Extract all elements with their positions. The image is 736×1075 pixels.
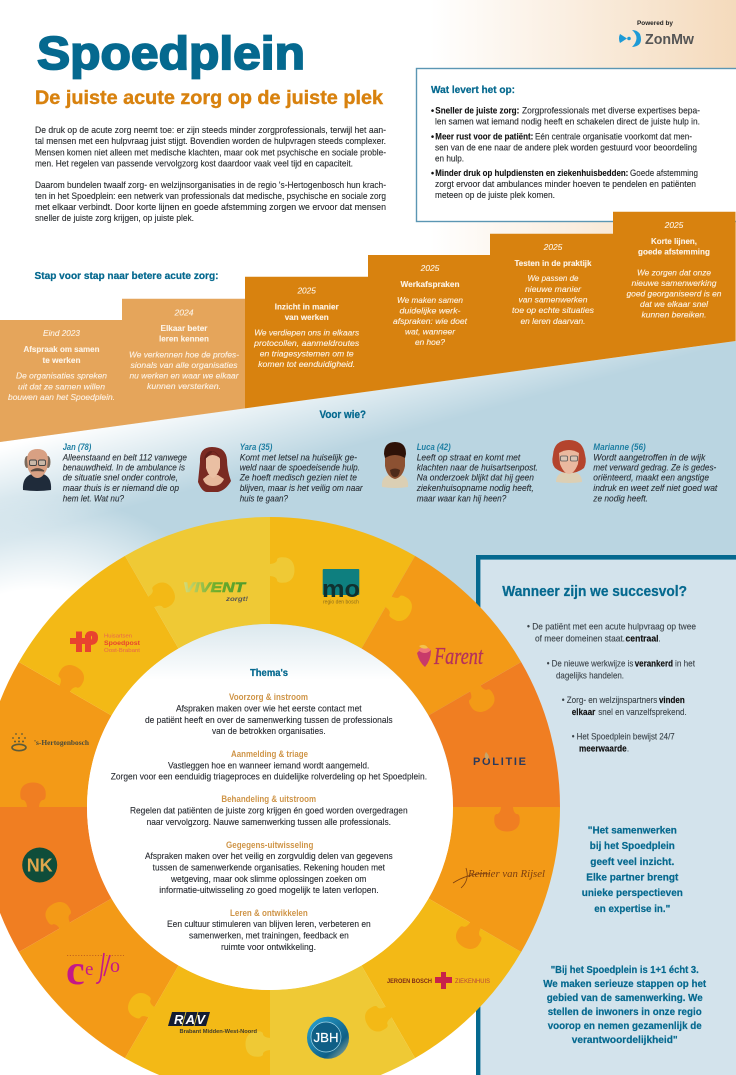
theme: voorzorg xyxy=(145,692,393,736)
step: werkafspraken xyxy=(393,263,468,347)
quote: 1+1 is 3: stellen de inwoners in onze regio xyxy=(548,1007,702,1018)
logo: ZonMw xyxy=(619,21,694,48)
theme: aanmelding: Vastleggen hoe en wanneer iemand wordt aangemeld. xyxy=(168,760,369,770)
text: Jan: Alleenstaand en belt 112 vanwege xyxy=(62,452,187,462)
text: Marianne: Marianne (56) xyxy=(593,442,646,452)
quote: samenwerken: bij het Spoedplein xyxy=(590,841,675,852)
step: korte lijnen: Korte lijnen, xyxy=(651,236,697,246)
heading: thema's: Thema's xyxy=(250,667,288,679)
theme: aanmelding: Aanmelding & triage xyxy=(231,749,308,759)
icon: Luca portrait xyxy=(382,442,408,488)
logo: RAV: RAV xyxy=(174,1012,206,1027)
logo: Politie: POLITIE xyxy=(473,756,526,768)
step: korte lijnen: nieuwe samenwerking xyxy=(632,278,717,288)
icon: Jan portrait xyxy=(23,449,51,491)
text: Yara: Ze hoeft medisch gezien niet te xyxy=(239,472,357,482)
step: korte lijnen: We zorgen dat onze xyxy=(637,268,711,278)
step: korte lijnen xyxy=(626,220,722,320)
text: Jan xyxy=(62,442,187,504)
text block: introduction: Mensen komen niet alleen met medische klachten, maar ook met psychische en sociale proble- xyxy=(35,148,386,158)
step: werkafspraken: afspraken: wie doet xyxy=(393,316,468,326)
logo: Huisartsen Spoedpost: Spoedpost xyxy=(104,640,141,647)
text: Yara: huis te gaan? xyxy=(240,494,288,504)
logo: Cello: o xyxy=(110,955,120,977)
step: eind 2023 xyxy=(8,328,115,402)
text: Luca: klachten naar de huisartsenpost. xyxy=(417,462,538,472)
list: success criteria: in het xyxy=(675,658,695,668)
list: benefits: • xyxy=(431,132,434,142)
text: Yara: Yara (35) xyxy=(240,442,272,452)
text: Jan: de situatie snel onder controle, xyxy=(63,472,178,482)
list: success criteria: . xyxy=(627,744,629,754)
logo: RAV: Brabant Midden-West-Noord xyxy=(180,1029,257,1035)
logo: 's-Hertogenbosch xyxy=(12,733,90,751)
text: Marianne: met verward gedrag. Ze is gedes- xyxy=(593,462,716,472)
logo: Farent xyxy=(417,644,484,670)
list: success criteria: of meer domeinen staat. xyxy=(535,634,625,644)
step: testen in de praktijk xyxy=(512,242,595,326)
step: 2024 xyxy=(129,308,240,391)
text block: introduction: sneller de juiste zorg krijgen, op juiste plek. xyxy=(35,213,194,223)
panel: wat levert het op xyxy=(416,68,736,222)
step: testen in de praktijk: toe op echte situaties xyxy=(512,305,595,315)
step: inzicht xyxy=(253,286,360,369)
persona: Yara xyxy=(198,442,364,504)
persona: Luca xyxy=(382,442,538,504)
list: success criteria: • De patiënt met een acute hulpvraag op twee xyxy=(527,622,696,632)
step: inzicht: komen tot eenduidigheid. xyxy=(258,359,355,369)
step: werkafspraken: We maken samen xyxy=(397,295,463,305)
step: 2024: sionals van alle organisaties xyxy=(130,360,238,370)
theme: gegevens xyxy=(145,840,393,895)
quote: samenwerken: Elke partner brengt xyxy=(586,872,679,884)
subtitle: De juiste acute zorg op de juiste plek xyxy=(35,87,383,109)
timeline: staircase of steps xyxy=(0,212,736,442)
logo: NK xyxy=(22,848,57,882)
heading: voor wie: Voor wie? xyxy=(320,409,366,421)
logo: Jeroen Bosch Ziekenhuis: JEROEN BOSCH xyxy=(387,979,432,985)
text: Jan: benauwdheid. In de ambulance is xyxy=(63,462,186,472)
theme: leren: Een cultuur stimuleren van blijven leren, verbeteren en xyxy=(167,919,371,929)
logo: Vivent: zorgt! xyxy=(225,596,249,603)
step: testen in de praktijk: We passen de xyxy=(528,273,579,283)
quote: samenwerken xyxy=(582,826,683,915)
logo: JBH: JBH xyxy=(314,1030,338,1045)
text: Luca: maar waar kan hij heen? xyxy=(417,494,506,504)
heading: succesvol: Wanneer zijn we succesvol? xyxy=(502,583,687,600)
text: Marianne: Wordt aangetroffen in de wijk xyxy=(593,452,706,462)
list: success criteria: snel en vanzelfsprekend. xyxy=(598,707,687,717)
step: eind 2023: Afspraak om samen xyxy=(24,344,100,354)
text: Yara: weld naar de spoedeisende hulp. xyxy=(240,462,360,472)
step: eind 2023: uit dat ze samen willen xyxy=(18,382,105,392)
step: inzicht: Inzicht in manier xyxy=(275,302,339,312)
step: werkafspraken: wat, wanneer xyxy=(405,326,456,336)
panel: wanneer zijn we succesvol xyxy=(476,555,736,1075)
theme: behandeling: Regelen dat patiënten de juiste zorg krijgen én goed worden overgedragen xyxy=(130,806,408,816)
list: success criteria xyxy=(527,622,696,754)
text: Jan: Jan (78) xyxy=(63,442,91,452)
logo: Huisartsen Spoedpost: Oost-Brabant xyxy=(104,648,141,654)
persona: Jan xyxy=(23,442,187,504)
theme: voorzorg: Voorzorg & instroom xyxy=(229,692,308,702)
logo: Cello: e xyxy=(85,959,93,980)
text: Marianne: oriënteerd, maakt een angstige xyxy=(593,472,709,482)
list: benefits xyxy=(431,106,700,200)
logo: Cello: c xyxy=(66,948,85,994)
step: testen in de praktijk: 2025 xyxy=(543,242,563,252)
text block: introduction: men. Het regelen van passende vervolgzorg kost daardoor vaak veel tijd en capaciteit. xyxy=(35,158,353,168)
list: success criteria: verankerd xyxy=(635,658,673,668)
step: 2024: kunnen versterken. xyxy=(147,381,221,391)
text block: introduction: Daarom bundelen twaalf zorg- en welzijnsorganisaties in de regio 's-Hertogenbosch hun krach- xyxy=(35,180,386,190)
list: success criteria: dagelijks handelen. xyxy=(556,671,624,681)
theme: leren xyxy=(167,908,371,952)
step: eind 2023: De organisaties spreken xyxy=(16,370,107,380)
step: inzicht: van werken xyxy=(285,312,329,322)
logo: Vivent: VIVENT xyxy=(183,579,247,595)
quote: samenwerken: en expertise in." xyxy=(594,904,670,915)
quote: samenwerken: unieke perspectieven xyxy=(582,888,683,899)
text: Yara xyxy=(239,442,364,504)
text: Yara: blijven, maar is het veilig om naar xyxy=(240,483,364,493)
quote: samenwerken: "Het samenwerken xyxy=(588,826,677,836)
theme: behandeling xyxy=(130,794,408,827)
step: 2024: nu werken en waar we elkaar xyxy=(130,370,240,380)
logo: Huisartsen Spoedpost: Huisartsen xyxy=(104,634,132,640)
logo: Vivent xyxy=(183,579,249,603)
step: korte lijnen: goed georganiseerd is en xyxy=(626,288,722,298)
logo: MO regio den bosch: mo xyxy=(322,576,360,603)
step: testen in de praktijk: en leren daarvan. xyxy=(520,316,586,326)
step: testen in de praktijk: nieuwe manier xyxy=(525,284,582,294)
list: success criteria: • De nieuwe werkwijze is xyxy=(547,658,634,668)
list: benefits: zorgt ervoor dat ambulances minder hoeven te pendelen en patiënten xyxy=(435,179,696,189)
step: korte lijnen: 2025 xyxy=(664,220,684,230)
step: eind 2023: bouwen aan het Spoedplein. xyxy=(8,392,115,402)
theme: leren: ruimte voor ontwikkeling. xyxy=(221,942,316,952)
text block: introduction: ten in het Spoedplein: een netwerk van professionals dat medische, psychische en sociale zorg xyxy=(35,191,386,201)
text: Marianne: indruk en weet zelf niet goed wat xyxy=(593,483,718,493)
text: Jan: maar thuis is er niemand die op xyxy=(63,483,179,493)
logo: Cello xyxy=(66,948,124,994)
theme: voorzorg: de patiënt heeft en over de samenwerking tussen de professionals xyxy=(145,715,393,725)
list: benefits: Eén centrale organisatie voorkomt dat men- xyxy=(535,132,692,142)
icon: Marianne portrait xyxy=(552,440,586,483)
text: Yara: Komt met letsel na huiselijk ge- xyxy=(240,452,357,462)
list: benefits: en hulp. xyxy=(435,154,464,164)
text block: introduction: tal mensen met een hulpvraag juist stijgt. Bovendien worden de hulpvragen steeds complexer. xyxy=(35,136,386,146)
quote: 1+1 is 3: We maken serieuze stappen op het xyxy=(543,979,707,990)
text block: introduction xyxy=(35,125,386,223)
theme: voorzorg: Afspraken maken over wie het eerste contact met xyxy=(176,704,362,714)
text: Luca: Luca (42) xyxy=(417,442,451,452)
step: inzicht: We verdiepen ons in elkaars xyxy=(254,328,360,338)
text: Jan: hem let. Wat nu? xyxy=(63,494,124,504)
logo: JBH xyxy=(307,1017,349,1059)
step: 2024: Elkaar beter xyxy=(160,323,208,333)
quote: 1+1 is 3: gebied van de samenwerking. We xyxy=(547,993,703,1004)
list: success criteria: centraal xyxy=(626,634,658,644)
list: success criteria: • Het Spoedplein bewijst 24/7 xyxy=(572,732,675,742)
list: success criteria: meerwaarde xyxy=(579,744,627,754)
list: benefits: sen van de ene naar de andere plek worden gestuurd voor beoordeling xyxy=(435,142,697,152)
step: inzicht: en triagesystemen om te xyxy=(260,348,354,358)
theme: leren: Leren & ontwikkelen xyxy=(230,908,308,918)
inner circle xyxy=(87,624,453,990)
theme: gegevens: Gegegens-uitwisseling xyxy=(226,840,313,850)
list: success criteria: • Zorg- en welzijnspartners xyxy=(562,695,658,705)
step: testen in de praktijk: van samenwerken xyxy=(518,294,588,304)
theme: gegevens: informatie-uitwisseling zo goed mogelijk te laten verlopen. xyxy=(159,885,379,895)
quote: 1+1 is 3: voorop en nemen gezamenlijk de xyxy=(548,1021,702,1032)
list: benefits: meteen op de juiste plek komen. xyxy=(435,190,555,200)
step: 2024: 2024 xyxy=(174,308,194,318)
logo: ZonMw: ZonMw xyxy=(645,31,694,48)
logo: Farent: Farent xyxy=(433,644,484,670)
logo: Reinier van Rijsel xyxy=(453,868,545,888)
theme: behandeling: Behandeling & uitstroom xyxy=(221,794,316,804)
logo: Reinier van Rijsel: Reinier van Rijsel xyxy=(467,869,545,880)
text: Marianne: ze nodig heeft. xyxy=(592,494,648,504)
logo: Huisartsen Spoedpost xyxy=(70,631,141,654)
step: testen in de praktijk: Testen in de praktijk xyxy=(514,258,592,268)
step: 2024: We verkennen hoe de profes- xyxy=(129,350,239,360)
list: benefits: • xyxy=(431,168,434,178)
step: inzicht: 2025 xyxy=(296,286,316,296)
step: 2024: leren kennen xyxy=(159,334,209,344)
logo: 's-Hertogenbosch: 's-Hertogenbosch xyxy=(34,738,90,747)
text: Luca: Na onderzoek blijkt dat hij geen xyxy=(417,472,534,482)
step: werkafspraken: Werkafspraken xyxy=(400,279,460,289)
theme: gegevens: tussen de samenwerkende organisaties. Rekening houden met xyxy=(153,862,385,872)
logo: Jeroen Bosch Ziekenhuis xyxy=(387,972,490,989)
list: benefits: len samen wat iemand nodig heeft en schakelen direct de juiste hulp in. xyxy=(435,116,700,126)
logo: RAV xyxy=(168,1012,257,1035)
theme: behandeling: naar vervolgzorg. Nauwe samenwerking tussen alle professionals. xyxy=(147,817,391,827)
logo: NK: NK xyxy=(27,856,53,876)
step: korte lijnen: kunnen bereiken. xyxy=(642,310,706,320)
list: success criteria: . xyxy=(658,634,661,644)
text block: introduction: De druk op de acute zorg neemt toe: er zijn steeds minder zorgprofessionals, terwijl het aan- xyxy=(35,125,386,135)
text block: introduction: met elkaar verbindt. Door korte lijnen en goede afstemming zorgen we ervoor dat mensen xyxy=(35,202,386,212)
list: benefits: Zorgprofessionals met diverse expertises bepa- xyxy=(522,106,700,116)
theme: leren: samenwerken, met trainingen, feedback en xyxy=(189,930,349,940)
theme: gegevens: wetgeving, maar ook slimme oplossingen zoeken om xyxy=(170,874,366,884)
puzzle tabs xyxy=(20,557,520,1057)
list: benefits: Sneller de juiste zorg: xyxy=(435,106,519,116)
list: success criteria: elkaar xyxy=(572,707,596,717)
text: Marianne xyxy=(592,442,718,504)
quote: 1+1 is 3: verantwoordelijkheid" xyxy=(572,1035,678,1046)
step: eind 2023: te werken xyxy=(42,355,80,365)
chart: puzzle ring of partner organisations xyxy=(0,517,560,1075)
list: success criteria: vinden xyxy=(659,695,685,705)
step: eind 2023: Eind 2023 xyxy=(43,328,80,338)
heading: wat levert het op: Wat levert het op: xyxy=(431,84,515,96)
quote: 1+1 is 3 xyxy=(543,965,707,1046)
text: Luca xyxy=(416,442,538,504)
theme: aanmelding: Zorgen voor een eenduidig triageproces en duidelijke rolverdeling op het Spoedplein. xyxy=(111,772,427,782)
title: Spoedplein xyxy=(37,27,305,79)
logo: MO regio den bosch: regio den bosch xyxy=(323,600,359,606)
theme: voorzorg: van de betrokken organisaties. xyxy=(212,726,326,736)
step: werkafspraken: en hoe? xyxy=(415,337,445,347)
theme: gegevens: Afspraken maken over het veilig en zorgvuldig delen van gegevens xyxy=(145,851,393,861)
step: korte lijnen: goede afstemming xyxy=(638,246,710,256)
logo: ZonMw: Powered by xyxy=(637,21,674,27)
step: inzicht: protocollen, aanmeldroutes xyxy=(253,338,360,348)
list: benefits: Meer rust voor de patiënt: xyxy=(435,132,533,142)
step: werkafspraken: duidelijke werk- xyxy=(400,306,461,316)
text block: thema's xyxy=(111,667,427,952)
quote: samenwerken: geeft veel inzicht. xyxy=(590,857,674,868)
step: korte lijnen: dat we elkaar snel xyxy=(640,299,709,309)
text: Luca: ziekenhuisopname nodig heeft, xyxy=(416,483,534,493)
step: werkafspraken: 2025 xyxy=(420,263,440,273)
heading: stap voor stap: Stap voor stap naar betere acute zorg: xyxy=(34,270,218,282)
text: Luca: Leeft op straat en komt met xyxy=(417,452,521,462)
list: benefits: Minder druk op hulpdiensten en ziekenhuisbedden: xyxy=(435,168,628,178)
persona: Marianne xyxy=(552,440,718,504)
list: benefits: • xyxy=(431,106,434,116)
quote: 1+1 is 3: "Bij het Spoedplein is 1+1 écht 3. xyxy=(551,965,699,976)
icon: Yara portrait xyxy=(198,447,231,492)
theme: aanmelding xyxy=(111,749,427,782)
logo: Jeroen Bosch Ziekenhuis: ZIEKENHUIS xyxy=(455,979,490,985)
list: benefits: Goede afstemming xyxy=(630,168,698,178)
